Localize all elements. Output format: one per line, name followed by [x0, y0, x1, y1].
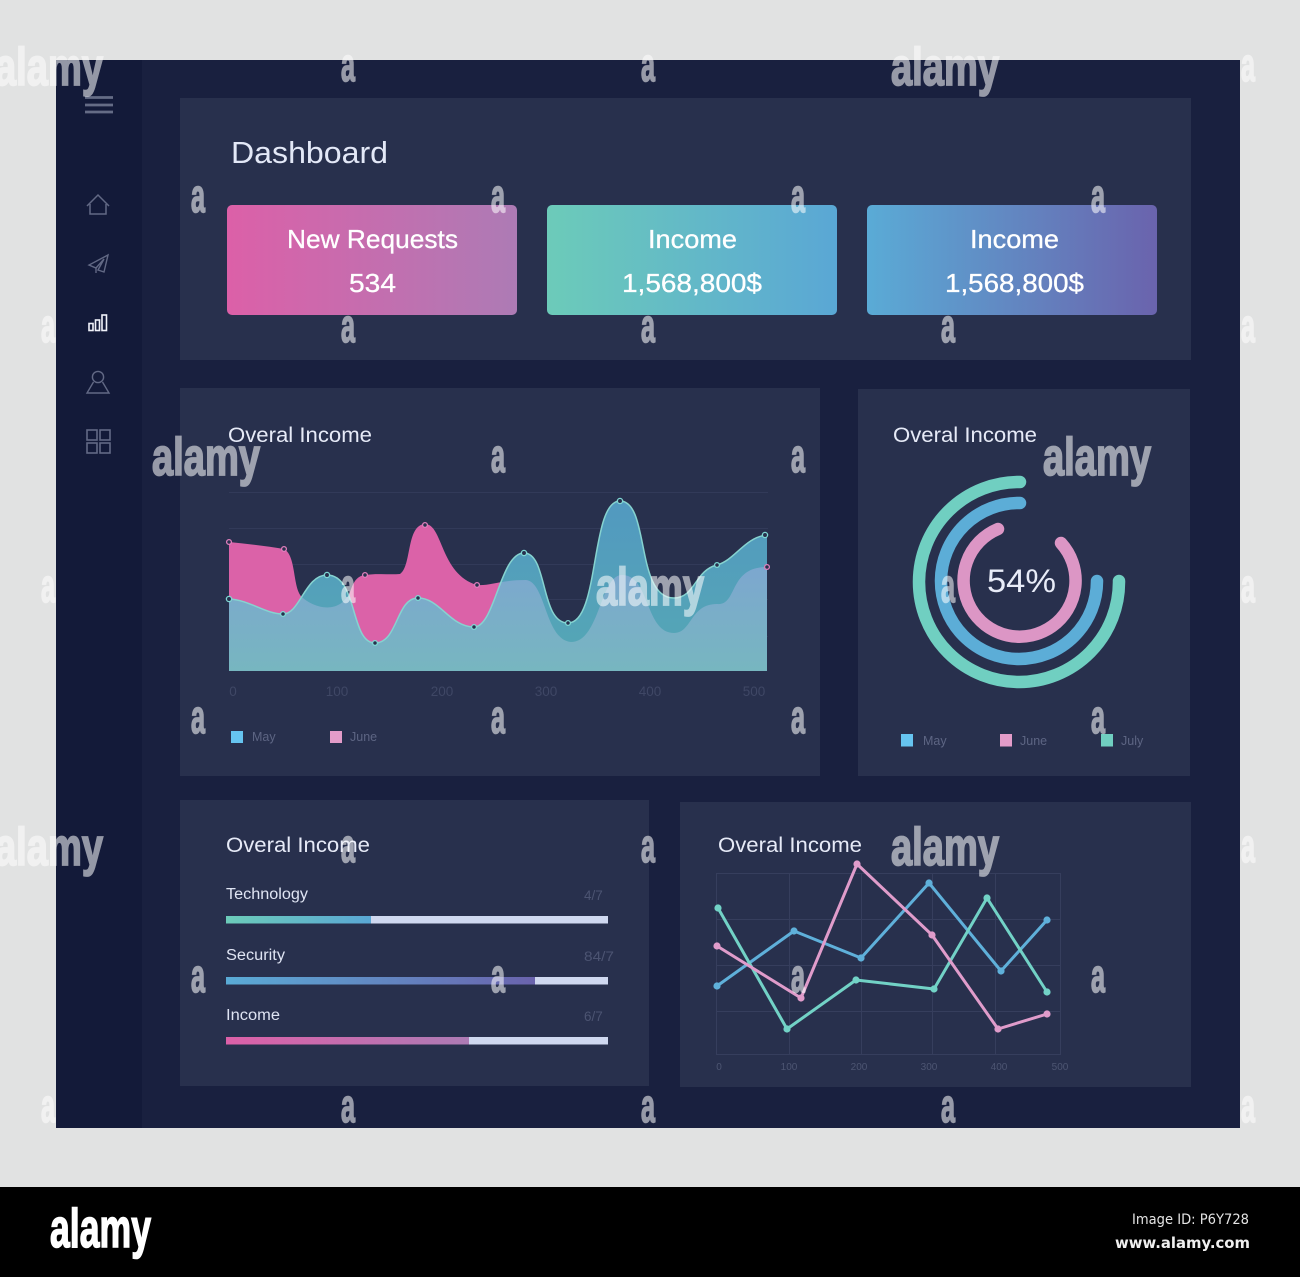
card: new requests: 534 — [349, 268, 396, 298]
progress: technology: Technology — [226, 886, 308, 903]
watermarks: a — [491, 169, 505, 222]
watermarks: a — [1241, 559, 1255, 612]
progress: income — [226, 1007, 608, 1044]
watermarks: a — [941, 299, 955, 352]
x axis labels: 500 — [1052, 1062, 1069, 1073]
panel: area chart — [180, 388, 820, 776]
image id: Image ID: P6Y728 — [1132, 1212, 1249, 1228]
line chart — [713, 860, 1051, 1033]
x axis labels: 500 — [743, 684, 765, 699]
legend: May — [252, 730, 276, 744]
watermarks: a — [641, 299, 655, 352]
x axis labels: 400 — [991, 1062, 1008, 1073]
icon: user — [87, 371, 109, 393]
card: income teal: 1,568,800$ — [622, 268, 763, 298]
legend: May — [923, 734, 947, 748]
legend: June — [350, 730, 377, 744]
watermarks: a — [491, 949, 505, 1002]
panel: line chart — [680, 802, 1191, 1087]
heading: Overal Income — [226, 834, 370, 857]
watermarks: a — [41, 299, 55, 352]
card: income blue — [867, 205, 1157, 315]
x axis labels: 200 — [431, 684, 453, 699]
x axis labels: 300 — [535, 684, 557, 699]
watermarks: a — [1091, 949, 1105, 1002]
watermarks: a — [341, 299, 355, 352]
radial rings — [919, 482, 1119, 682]
card: income blue: Income — [970, 224, 1059, 254]
line: blue — [713, 879, 1051, 990]
panel: radial chart — [858, 389, 1190, 776]
card: income teal: Income — [648, 224, 737, 254]
x axis labels: 0 — [716, 1062, 722, 1073]
heading: Overal Income — [893, 424, 1037, 447]
x axis labels: 100 — [326, 684, 348, 699]
progress: income: Income — [226, 1007, 280, 1024]
x axis labels: 0 — [229, 684, 237, 699]
watermarks: a — [191, 690, 205, 743]
progress: technology: 4/7 — [584, 888, 603, 903]
icon: menu — [85, 98, 113, 112]
watermarks: a — [941, 1079, 955, 1132]
watermarks: a — [1091, 690, 1105, 743]
watermarks: a — [1241, 1079, 1255, 1132]
x axis labels — [229, 684, 765, 699]
line: teal — [714, 894, 1051, 1033]
watermarks: a — [641, 38, 655, 91]
watermarks: a — [191, 949, 205, 1002]
legend: June — [1020, 734, 1047, 748]
x axis labels: 200 — [851, 1062, 868, 1073]
watermarks: a — [791, 169, 805, 222]
watermarks: a — [791, 690, 805, 743]
x axis labels — [716, 1062, 1069, 1073]
progress: security — [226, 947, 614, 984]
watermarks: a — [1241, 38, 1255, 91]
site url: www.alamy.com — [1115, 1234, 1250, 1252]
heading: Dashboard: Dashboard — [231, 135, 388, 170]
card: income teal — [547, 205, 837, 315]
heading: Overal Income — [228, 424, 372, 447]
watermarks: a — [341, 819, 355, 872]
watermarks: a — [941, 559, 955, 612]
watermarks: a — [1241, 299, 1255, 352]
panel: progress bars — [180, 800, 649, 1086]
legend — [901, 734, 1144, 748]
heading: Overal Income — [718, 834, 862, 857]
watermarks: a — [41, 1079, 55, 1132]
watermarks: a — [491, 690, 505, 743]
legend — [231, 730, 377, 744]
watermarks: a — [191, 169, 205, 222]
watermarks: a — [41, 559, 55, 612]
footer bar — [0, 1187, 1300, 1277]
line: pink — [713, 860, 1051, 1033]
watermarks: a — [641, 1079, 655, 1132]
card: new requests — [227, 205, 517, 315]
watermarks: a — [1091, 169, 1105, 222]
icon: paper plane — [89, 255, 108, 273]
footer logo: alamy — [50, 1197, 151, 1259]
watermarks: alamy — [152, 428, 260, 487]
x axis labels: 100 — [781, 1062, 798, 1073]
center value: 54% — [987, 563, 1056, 599]
watermarks: alamy — [891, 38, 999, 97]
area chart — [226, 498, 769, 671]
watermarks: a — [491, 429, 505, 482]
progress: security: Security — [226, 947, 285, 964]
watermarks: a — [1241, 819, 1255, 872]
sidebar — [56, 60, 142, 1128]
card: new requests: New Requests — [287, 224, 458, 254]
icon: grid — [87, 430, 110, 453]
watermarks: a — [341, 559, 355, 612]
watermarks: a — [341, 1079, 355, 1132]
dashboard frame — [56, 60, 1240, 1128]
watermarks: alamy — [891, 818, 999, 877]
legend: July — [1121, 734, 1144, 748]
watermarks: alamy — [1043, 428, 1151, 487]
watermarks: a — [791, 429, 805, 482]
panel: dashboard header — [180, 98, 1191, 360]
card: income blue: 1,568,800$ — [945, 268, 1085, 298]
progress: income: 6/7 — [584, 1009, 603, 1024]
progress: security: 84/7 — [584, 949, 614, 964]
x axis labels: 300 — [921, 1062, 938, 1073]
icon: home — [87, 195, 109, 214]
watermarks: a — [641, 819, 655, 872]
icon: bar chart — [89, 315, 106, 330]
progress: technology — [226, 886, 608, 924]
watermarks: a — [791, 949, 805, 1002]
watermarks: alamy — [596, 558, 704, 617]
watermarks: a — [341, 38, 355, 91]
x axis labels: 400 — [639, 684, 661, 699]
